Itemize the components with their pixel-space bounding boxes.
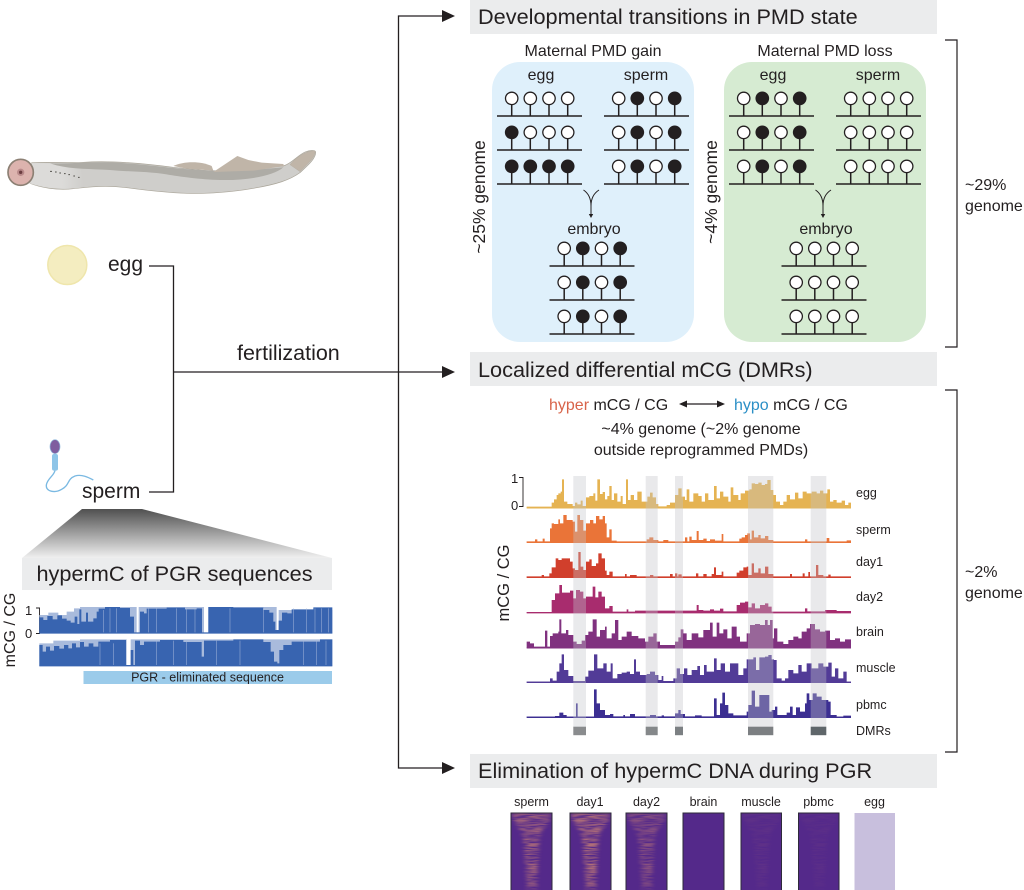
heading: elimination of hypermC DNA: Elimination of hypermC DNA during PGR [478, 758, 872, 783]
heatmap: muscle: muscle [741, 795, 781, 809]
heading: localized differential mCG: Localized differential mCG (DMRs) [478, 357, 813, 382]
embryo rows: embryo [799, 221, 853, 238]
heading: developmental transitions: Developmental transitions in PMD state [478, 4, 858, 29]
bracket: ~2% genome [945, 390, 1023, 752]
heatmap: day1: day1 [576, 795, 604, 809]
annotation bar: PGR - eliminated sequence [84, 670, 332, 684]
heading: developmental transitions [470, 0, 937, 34]
heatmap: day2 [626, 795, 667, 890]
panel background [724, 62, 926, 342]
bracket: ~2% genome: ~2% [965, 564, 997, 581]
heatmap: pbmc [798, 795, 840, 890]
heading: hypermC of PGR sequences [22, 558, 332, 590]
heatmap: day1 [570, 795, 611, 890]
axis ticks: 1 [25, 603, 32, 618]
axis ticks [25, 603, 40, 641]
track labels: egg [856, 486, 877, 500]
bracket: ~2% genome: genome [965, 585, 1023, 602]
icon: lamprey [8, 150, 316, 193]
panel background [492, 62, 694, 342]
track labels: day2 [856, 590, 883, 604]
annotation bar: PGR - eliminated sequence: PGR - eliminated sequence [131, 670, 284, 684]
egg rows: egg [528, 67, 554, 84]
heatmap: sperm: sperm [514, 795, 549, 809]
chart: mCG tracks across tissues [495, 471, 896, 738]
heatmap: pbmc: pbmc [803, 795, 834, 809]
chart: PGR mCG tracks [2, 593, 332, 667]
heatmap: brain: brain [690, 795, 717, 809]
merge arrow [816, 190, 831, 218]
panel: maternal PMD gain [469, 43, 694, 342]
icon: egg cell [48, 246, 87, 284]
tracks [527, 479, 851, 717]
egg rows: egg [760, 67, 786, 84]
embryo rows [782, 221, 866, 334]
panel heading: Maternal PMD loss [757, 43, 893, 60]
heatmap: egg: egg [864, 795, 885, 809]
axis ticks [511, 471, 523, 513]
track labels: pbmc [856, 698, 887, 712]
egg rows [497, 67, 582, 184]
text: DMR genome fraction: outside reprogrammed PMDs) [594, 442, 808, 459]
zoom fan from sperm [22, 509, 332, 558]
axis label: mCG / CG: mCG / CG [2, 593, 19, 667]
track labels: DMRs [856, 724, 891, 738]
heatmap: day2: day2 [633, 795, 660, 809]
label: ~25% genome: ~25% genome [469, 140, 489, 254]
text: DMR genome fraction [594, 421, 808, 459]
label: ~4% genome: ~4% genome [701, 140, 721, 244]
tracks [39, 607, 332, 666]
track labels: sperm [856, 523, 891, 537]
bracket: ~29% genome: ~29% [965, 177, 1006, 194]
arrow: egg and sperm join at fertilization [149, 10, 455, 774]
sperm rows [604, 67, 689, 184]
bracket: ~29% genome [945, 40, 1023, 347]
label: sperm: sperm [82, 480, 140, 503]
bracket: ~29% genome: genome [965, 198, 1023, 215]
egg rows [729, 67, 814, 184]
panel heading: Maternal PMD gain [525, 43, 661, 60]
heatmap: egg [854, 795, 895, 890]
track labels: muscle [856, 661, 896, 675]
DMR highlight bands [573, 476, 826, 727]
sperm rows: sperm [856, 67, 900, 84]
heading: localized differential mCG [470, 352, 937, 386]
heatmaps: elimination across samples [511, 795, 895, 890]
label: fertilization: fertilization [237, 341, 340, 365]
panel: maternal PMD loss [701, 43, 926, 342]
legend: hyper and hypo mCG: hyper mCG / CG [549, 397, 668, 414]
track labels: day1 [856, 555, 883, 569]
axis ticks: 0 [511, 498, 518, 513]
heading: hypermC of PGR sequences: hypermC of PGR sequences [36, 561, 313, 586]
track labels: brain [856, 625, 884, 639]
sperm rows: sperm [624, 67, 668, 84]
axis ticks: 1 [511, 471, 518, 486]
sperm rows [836, 67, 921, 184]
embryo rows [550, 221, 634, 334]
merge arrow [584, 190, 599, 218]
legend: hyper and hypo mCG [549, 397, 848, 414]
heatmap: brain [683, 795, 724, 890]
embryo rows: embryo [567, 221, 621, 238]
heading: elimination of hypermC DNA [470, 754, 937, 788]
track labels [856, 486, 896, 738]
text: DMR genome fraction: ~4% genome (~2% genome [601, 421, 801, 438]
axis ticks: 0 [25, 626, 32, 641]
icon: sperm cell [46, 440, 93, 491]
heatmap: sperm [511, 795, 552, 890]
label: egg: egg [108, 253, 143, 276]
DMR blocks [573, 727, 826, 735]
heatmap: muscle [741, 795, 782, 890]
axis label: mCG / CG: mCG / CG [495, 544, 513, 622]
legend: hyper and hypo mCG: hypo mCG / CG [734, 397, 848, 414]
